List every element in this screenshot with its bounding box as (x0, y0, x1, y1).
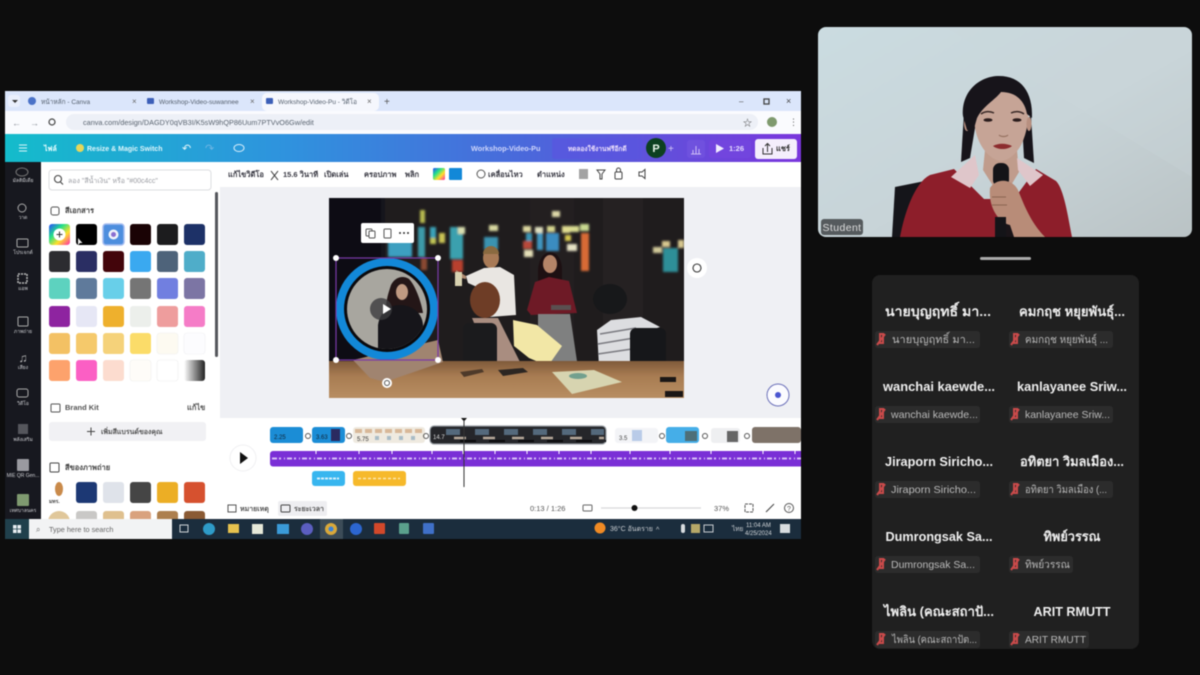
participant tile 1: นายบุญฤทธิ์ มา... (885, 301, 991, 320)
play button (230, 445, 256, 471)
add brand colour button (49, 422, 206, 441)
seated woman with red hair (470, 281, 520, 362)
participant tile 2: คมกฤช หยุยพันธุ์ ... (1025, 333, 1108, 346)
panel: speaker webcam video (818, 27, 1192, 237)
participant tile 6: อทิตยา วิมลเมือง (... (1025, 483, 1107, 496)
left icon rail: มัลติมีเดีย (13, 177, 33, 184)
left icon rail: พลังเสริม (13, 436, 33, 443)
address bar: ⋮ (789, 117, 798, 127)
Canva header bar (5, 134, 801, 162)
element toolbar: ครอปภาพ (364, 170, 396, 179)
participant tile 4: kanlayanee Sriw... (1025, 409, 1110, 421)
office chair (892, 181, 925, 237)
neck (982, 151, 1020, 185)
name tag: Student: Student (822, 222, 862, 234)
element toolbar: แก้ไขวิดีโอ (228, 169, 264, 179)
left icon rail: วาด (19, 215, 27, 221)
left icon rail (5, 162, 41, 519)
video canvas: office meeting scene (329, 198, 684, 398)
Canva header bar: P (652, 143, 660, 155)
participant tile 9 (875, 603, 994, 648)
timeline footer controls: ? (787, 506, 791, 513)
papers in hand (513, 320, 562, 366)
browser tab bar: × (367, 97, 372, 106)
address bar: → (30, 118, 39, 128)
timeline footer controls: 37% (714, 504, 729, 513)
Canva header bar: Workshop-Video-Pu (471, 144, 540, 153)
timeline footer controls: หมายเหตุ (240, 506, 269, 513)
Canva header bar: แชร์ (776, 144, 791, 153)
participant tile 5 (875, 454, 993, 498)
participant tile 10: ARIT RMUTT (1034, 604, 1111, 619)
Canva header bar: Resize & Magic Switch (87, 146, 162, 153)
participant tile 8 (1009, 529, 1100, 573)
participant tile 9: ไพลิน (คณะสถาปั... (882, 603, 994, 619)
hair strands (961, 112, 1034, 163)
woman in red standing (527, 252, 578, 368)
left icon rail: วิดีโอ (17, 400, 29, 407)
wooden table (329, 361, 684, 398)
participant tile 1 (875, 301, 991, 348)
participant tile 7: Dumrongsak Sa... (886, 529, 992, 544)
seated man in striped shirt (596, 284, 666, 362)
participant tile 3: wanchai kaewde... (890, 409, 978, 421)
icon: magic assistant button (767, 384, 789, 406)
pink collar (951, 155, 1043, 188)
Canva header bar: ↶ (182, 143, 191, 155)
left icon rail: เสียง (18, 364, 29, 371)
browser tab bar: × (786, 96, 791, 106)
Windows taskbar: ^ (656, 527, 660, 534)
Windows taskbar (5, 519, 801, 539)
timeline footer controls: 0:13 / 1:26 (530, 504, 565, 513)
search box: ลอง "สีน้ำเงิน" หรือ "#00c4cc" (68, 174, 158, 185)
brand kit row (51, 402, 205, 412)
name tag: Student (821, 219, 863, 235)
browser tab bar: × (132, 97, 137, 106)
colour swatches: document (49, 224, 205, 381)
participant tile 5: Jiraporn Siricho... (885, 454, 993, 469)
left icon rail: โปรเจกต์ (13, 249, 33, 256)
video clips track (270, 426, 801, 444)
participant tile 2: คมกฤช หยุยพันธุ์... (1019, 304, 1125, 320)
element toolbar: 15.6 วินาที (283, 170, 318, 179)
search box (49, 170, 211, 190)
circular presenter video frame (336, 258, 438, 360)
table items (353, 340, 683, 397)
selection frame (333, 255, 441, 388)
address bar (5, 111, 801, 134)
purple audio track (270, 451, 810, 466)
element toolbar: เปิดเล่น (324, 170, 349, 179)
participant tile 1: นายบุญฤทธิ์ มา... (892, 331, 975, 346)
video clips track: 2.25 (274, 435, 286, 441)
participant tile 7 (875, 529, 992, 573)
participant tile 4: kanlayanee Sriw... (1017, 379, 1127, 394)
man in white shirt (455, 246, 516, 317)
panel: participant gallery (872, 275, 1139, 649)
left icon rail: แอพ (18, 286, 28, 292)
playhead (461, 418, 467, 487)
add brand colour button: เพิ่มสีแบรนด์ของคุณ (101, 426, 163, 436)
hair top (963, 76, 1032, 132)
canvas workspace background (220, 187, 801, 418)
hand and microphone (990, 163, 1045, 237)
participant tile 10 (1009, 604, 1111, 648)
left icon rail: ภาพถ่าย (14, 329, 32, 335)
address bar: ☆ (743, 118, 752, 128)
heading: document colours (51, 206, 95, 215)
color picker side panel (41, 162, 219, 533)
panel: browser window with Canva editor (5, 91, 810, 539)
brand kit row: แก้ไข (187, 402, 205, 412)
participant tile 6 (1009, 454, 1124, 498)
red jacket (900, 169, 1072, 237)
face (964, 90, 1032, 161)
participant tile 10: ARIT RMUTT (1025, 634, 1087, 646)
colour swatches: photo (48, 481, 206, 520)
heading: document colours: สีเอกสาร (65, 206, 95, 215)
Canva header bar: + (668, 144, 674, 155)
left icon rail: MIE QR Gen... (7, 473, 39, 479)
browser tab bar: Workshop-Video-suwannee (159, 99, 239, 106)
blue and yellow audio clips (312, 471, 406, 486)
Canva header bar: ↷ (205, 143, 214, 155)
video clips track: 3.63 (316, 435, 328, 441)
Canva header bar: ไฟล์ (43, 144, 57, 153)
video clips track: 14.7 (433, 435, 445, 441)
video clips track: 5.75 (357, 437, 369, 443)
participant tile 8: ทิพย์วรรณ (1044, 529, 1100, 544)
browser tab bar: Workshop-Video-Pu - วิดีโอ (278, 98, 357, 106)
browser tab bar: × (250, 97, 255, 106)
participant tile 6: อทิตยา วิมลเมือง... (1020, 454, 1124, 469)
Canva header bar: 1:26 (729, 144, 744, 153)
floating context menu (361, 223, 414, 243)
address bar: ← (12, 118, 21, 128)
participant tile 2 (1009, 304, 1125, 348)
timeline panel (220, 418, 810, 519)
participant tile 7: Dumrongsak Sa... (891, 559, 975, 571)
video clips track: 3.5 (619, 436, 628, 442)
sticky notes on wall (388, 210, 684, 272)
Windows taskbar: 36°C อันตราย (610, 525, 653, 533)
timeline footer controls: ระยะเวลา (294, 506, 324, 513)
heading: photo colours: สีของภาพถ่าย (65, 463, 110, 472)
participant tile 8: ทิพย์วรรณ (1025, 558, 1070, 571)
Windows taskbar: 11:04 AM (746, 523, 771, 529)
address bar: canva.com/design/DAGDY0qVB3I/K5sW9hQP86Uum7PTVvO6Gw/edit (83, 118, 314, 127)
participant tile 9: ไพลิน (คณะสถาปัต... (891, 633, 977, 646)
participant tile 3 (875, 379, 995, 423)
participant tile 3: wanchai kaewde... (882, 379, 995, 394)
left icon rail: เทศบาลนคร (10, 508, 37, 514)
drag handle (980, 257, 1031, 260)
browser tab bar: + (384, 97, 390, 108)
Windows taskbar: 4/25/2024 (745, 531, 772, 537)
Windows taskbar: Type here to search (49, 525, 114, 534)
browser tab bar (5, 91, 801, 111)
Windows taskbar: ⌕ (36, 525, 40, 534)
Windows taskbar: ไทย (731, 525, 744, 533)
element toolbar: ตำแหน่ง (537, 170, 565, 179)
Canva header bar: ทดลองใช้งานฟรีอีกดี (568, 144, 627, 153)
participant tile 5: Jiraporn Siricho... (891, 484, 976, 496)
brand kit row: Brand Kit (65, 403, 99, 412)
browser tab bar: หน้าหลัก - Canva (41, 98, 91, 106)
element toolbar: พลิก (405, 170, 420, 179)
scrollbar (215, 192, 218, 357)
icon: comment button (687, 258, 707, 278)
colour swatches: photo: มทร. (49, 499, 60, 505)
left icon rail: ♫ (18, 351, 28, 365)
element toolbar: เคลื่อนไหว (488, 168, 523, 179)
browser tab bar: – (739, 97, 744, 106)
timeline footer controls (228, 501, 794, 516)
element toolbar (220, 162, 801, 187)
participant tile 4 (1009, 379, 1127, 423)
